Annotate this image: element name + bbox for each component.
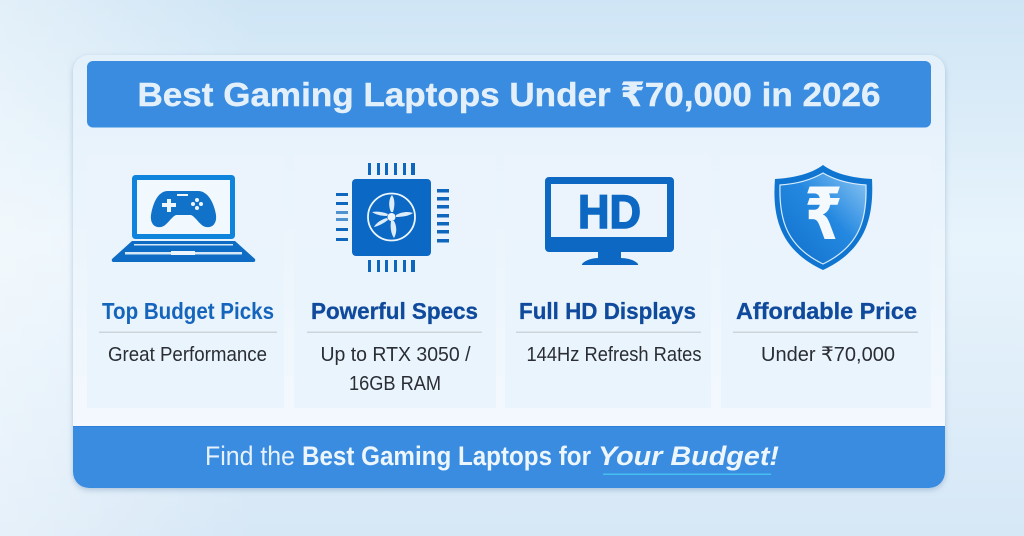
icon: laptop with gamepad [112,178,255,262]
panel: main card [73,55,945,488]
icon: chip with fan [336,163,449,272]
heading: Full HD Displays [519,298,696,324]
footer banner [73,426,945,488]
heading: Top Budget Picks [102,298,274,324]
panel: top budget picks [87,155,284,408]
icon: hd monitor: HD [578,185,641,238]
footer banner: Best Gaming Laptops for [302,441,591,471]
icon: rupee shield [774,165,872,270]
text [320,344,471,395]
heading: Powerful Specs [311,298,478,324]
text: Great Performance [108,344,267,366]
icon: hd monitor [545,177,674,265]
text: Up to RTX 3050 / [320,344,471,366]
text: Under ₹70,000 [761,344,895,366]
heading: Affordable Price [736,298,917,324]
icon: rupee shield: ₹ [804,172,842,256]
footer banner: Find the [205,441,295,471]
text: 16GB RAM [349,373,441,395]
panel: affordable price [721,155,931,408]
panel: powerful specs [294,155,496,408]
title banner: Best Gaming Laptops Under ₹70,000 in 2026 [138,77,880,114]
title banner [87,61,931,128]
text: 144Hz Refresh Rates [526,344,702,366]
footer banner: Your Budget! [598,441,779,471]
panel: full hd displays [505,155,711,408]
